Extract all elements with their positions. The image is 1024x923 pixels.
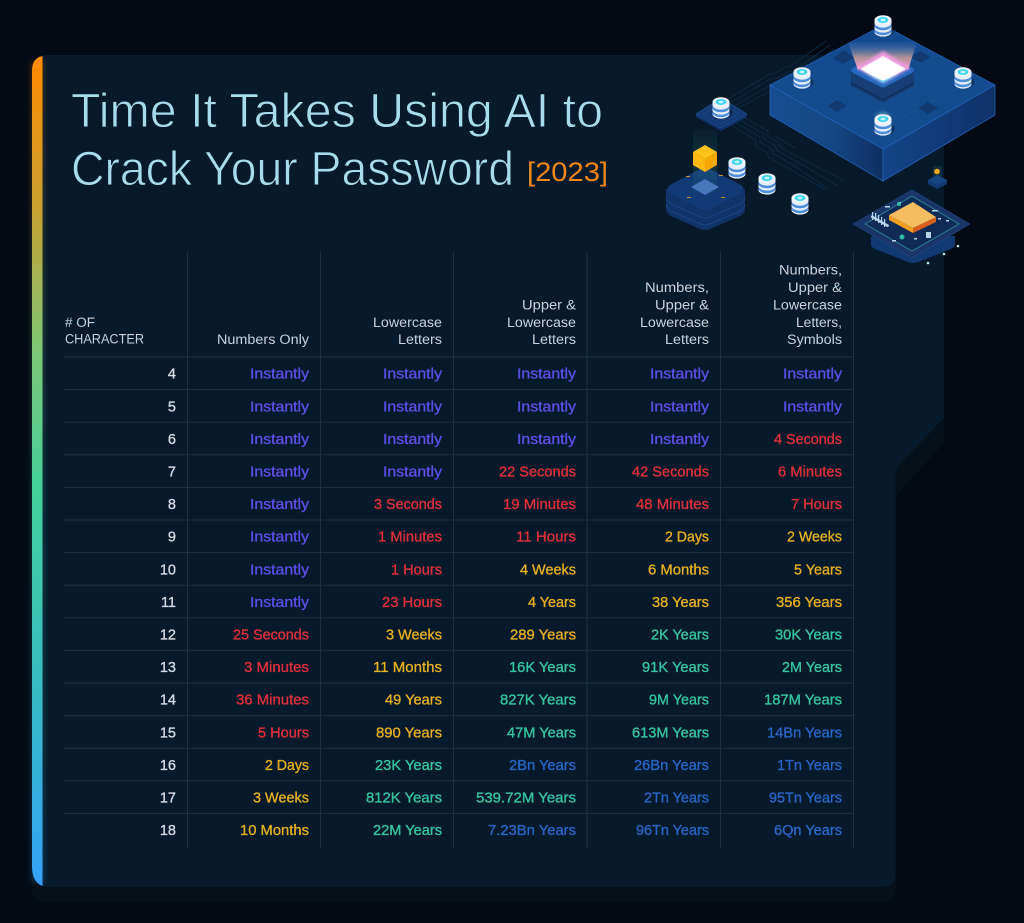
row 14 characters: 827K Years — [500, 693, 576, 709]
row 17 characters: 95Tn Years — [769, 790, 842, 806]
row 18 characters: 6Qn Years — [774, 823, 842, 839]
header: numbers upper lowercase letters: Upper & — [655, 298, 709, 312]
row 6 characters: Instantly — [650, 432, 710, 448]
header: numbers upper lowercase letters symbols: Symbols — [787, 332, 842, 347]
light cone — [848, 42, 917, 70]
row 16 characters: 26Bn Years — [634, 758, 709, 774]
illustration: large server platform — [770, 25, 995, 181]
gradient accent bar — [31, 56, 44, 886]
row 6 characters: Instantly — [383, 432, 443, 448]
row 10 characters: 4 Weeks — [520, 562, 576, 578]
icon: database trail 2 — [758, 173, 778, 195]
row 18 characters: 7.23Bn Years — [488, 823, 576, 839]
row 9 characters: Instantly — [250, 530, 310, 546]
indicator dots — [927, 245, 959, 264]
row 15 characters: 14Bn Years — [767, 725, 842, 741]
header: upper and lowercase letters: Upper & — [522, 298, 576, 312]
row 6 characters: Instantly — [517, 432, 577, 448]
row 5 characters: Instantly — [383, 399, 443, 415]
row 18 characters: 22M Years — [373, 823, 442, 839]
header: numbers only: Numbers Only — [217, 332, 309, 347]
row 8 characters: 3 Seconds — [374, 497, 442, 513]
row 8 characters — [168, 497, 842, 513]
row 8 characters: 19 Minutes — [503, 497, 576, 513]
row 17 characters: 2Tn Years — [644, 790, 709, 806]
inner pad — [691, 179, 719, 195]
platform right face — [883, 85, 995, 181]
row 5 characters: Instantly — [650, 399, 710, 415]
glowing screen — [857, 51, 910, 83]
header: upper and lowercase letters: Letters — [532, 332, 576, 347]
row 11 characters: Instantly — [250, 595, 310, 611]
row 16 characters: 2 Days — [265, 758, 309, 774]
row 17 characters: 539.72M Years — [476, 790, 576, 806]
header: numbers upper lowercase letters symbols: Lowercase — [773, 298, 842, 312]
illustration: small beacon — [928, 166, 947, 189]
icon: database trail 3 — [792, 193, 812, 215]
title year tag: [2023] — [527, 157, 608, 187]
row 14 characters: 9M Years — [649, 693, 709, 709]
illustration: circuit traces — [726, 41, 845, 190]
header: numbers upper lowercase letters: Lowercase — [640, 315, 709, 330]
row 4 characters: Instantly — [517, 367, 577, 383]
row 6 characters: 4 Seconds — [774, 432, 842, 448]
row 15 characters: 890 Years — [376, 725, 442, 741]
row 16 characters: 2Bn Years — [509, 758, 576, 774]
row 5 characters: 5 — [168, 399, 176, 415]
header: numbers upper lowercase letters — [640, 280, 709, 347]
row 6 characters — [168, 432, 842, 448]
row 10 characters: 6 Months — [648, 562, 709, 578]
row 12 characters: 2K Years — [651, 628, 709, 644]
row 12 characters: 289 Years — [510, 628, 576, 644]
title: Time It Takes Using AI to — [71, 85, 603, 138]
icon: database on node — [712, 97, 732, 119]
header: numbers upper lowercase letters: Letters — [665, 332, 709, 347]
header: numbers upper lowercase letters symbols — [773, 262, 842, 347]
row 11 characters: 11 — [161, 595, 176, 611]
row 14 characters: 36 Minutes — [236, 693, 309, 709]
row 11 characters: 23 Hours — [382, 595, 442, 611]
platform left face — [770, 85, 883, 181]
row 10 characters: 5 Years — [794, 562, 842, 578]
header: upper and lowercase letters — [507, 298, 576, 347]
row 7 characters: 6 Minutes — [778, 464, 842, 480]
header: upper and lowercase letters: Lowercase — [507, 315, 576, 330]
row 14 characters: 14 — [160, 693, 176, 709]
row 15 characters: 15 — [160, 725, 176, 741]
row 12 characters: 25 Seconds — [233, 628, 309, 644]
title: Crack Your Password — [71, 143, 514, 196]
row 12 characters: 3 Weeks — [386, 628, 442, 644]
row 9 characters: 11 Hours — [516, 530, 576, 546]
row 4 characters: Instantly — [250, 367, 310, 383]
row 18 characters: 18 — [160, 823, 176, 839]
header: lowercase letters: Letters — [398, 332, 442, 347]
row 11 characters: 38 Years — [652, 595, 709, 611]
header: numbers upper lowercase letters symbols: Numbers, — [779, 262, 842, 278]
orange processor block — [889, 215, 913, 233]
row 7 characters: 42 Seconds — [632, 464, 709, 480]
icon: database top — [874, 15, 894, 37]
row 17 characters: 812K Years — [366, 790, 442, 806]
row 5 characters: Instantly — [250, 399, 310, 415]
row 13 characters: 13 — [160, 660, 176, 676]
row 15 characters: 47M Years — [507, 725, 576, 741]
illustration: small node platform — [696, 97, 747, 131]
table body — [160, 367, 843, 839]
row 4 characters: 4 — [168, 367, 176, 383]
row 9 characters: 1 Minutes — [378, 530, 442, 546]
row 8 characters: 8 — [168, 497, 176, 513]
row 7 characters: 22 Seconds — [499, 464, 576, 480]
row 5 characters: Instantly — [517, 399, 577, 415]
icon: database trail 1 — [728, 157, 748, 179]
row 11 characters: 4 Years — [528, 595, 576, 611]
row 12 characters: 30K Years — [775, 628, 842, 644]
row 4 characters: Instantly — [650, 367, 710, 383]
row 16 characters: 1Tn Years — [777, 758, 842, 774]
header: numbers upper lowercase letters symbols: Letters, — [796, 315, 842, 330]
row 11 characters: 356 Years — [776, 595, 842, 611]
platform sockets — [828, 50, 938, 114]
row 7 characters: Instantly — [383, 464, 443, 480]
row 12 characters — [160, 628, 842, 644]
row 16 characters: 16 — [160, 758, 176, 774]
illustration: processor chip — [853, 190, 970, 264]
row 11 characters — [161, 595, 842, 611]
row 18 characters: 96Tn Years — [636, 823, 709, 839]
header: number of characters: # OF — [65, 315, 95, 330]
row 4 characters: Instantly — [383, 367, 443, 383]
platform top face — [770, 25, 995, 149]
icon: database right — [954, 67, 974, 89]
row 14 characters: 49 Years — [385, 693, 442, 709]
row 10 characters — [160, 562, 842, 578]
row 8 characters: 48 Minutes — [636, 497, 709, 513]
row 9 characters — [168, 530, 842, 546]
row 7 characters: 7 — [168, 464, 176, 480]
header: number of characters — [65, 315, 144, 346]
data table — [64, 252, 854, 848]
row 14 characters: 187M Years — [764, 693, 842, 709]
row 9 characters: 2 Weeks — [787, 530, 842, 546]
row 15 characters: 613M Years — [632, 725, 709, 741]
row 7 characters: Instantly — [250, 464, 310, 480]
row 4 characters: Instantly — [783, 367, 843, 383]
row 8 characters: 7 Hours — [791, 497, 842, 513]
row 9 characters: 2 Days — [665, 530, 709, 546]
table header — [65, 262, 842, 347]
row 13 characters: 16K Years — [509, 660, 576, 676]
row 13 characters: 2M Years — [782, 660, 842, 676]
row 10 characters: 10 — [160, 562, 176, 578]
row 6 characters: 6 — [168, 432, 176, 448]
row 8 characters: Instantly — [250, 497, 310, 513]
row 18 characters: 10 Months — [240, 823, 309, 839]
row 18 characters — [160, 823, 842, 839]
row 9 characters: 9 — [168, 530, 176, 546]
icon: database left — [794, 67, 814, 89]
row 16 characters: 23K Years — [375, 758, 442, 774]
header: lowercase letters — [373, 315, 442, 347]
row 6 characters: Instantly — [250, 432, 310, 448]
row 5 characters — [168, 399, 843, 415]
row 17 characters: 17 — [160, 790, 176, 806]
beam — [693, 129, 717, 193]
row 17 characters: 3 Weeks — [253, 790, 309, 806]
row 13 characters: 91K Years — [642, 660, 709, 676]
illustration: stacked platform with cube — [666, 129, 745, 230]
row 13 characters: 11 Months — [373, 660, 442, 676]
row 12 characters: 12 — [160, 628, 176, 644]
row 13 characters: 3 Minutes — [244, 660, 309, 676]
row 13 characters — [160, 660, 842, 676]
header: lowercase letters: Lowercase — [373, 315, 442, 330]
center chip base — [851, 53, 914, 103]
row 17 characters — [160, 790, 842, 806]
row 15 characters: 5 Hours — [258, 725, 309, 741]
row 4 characters — [168, 367, 843, 383]
row 14 characters — [160, 693, 842, 709]
row 10 characters: 1 Hours — [391, 562, 442, 578]
row 7 characters — [168, 464, 842, 480]
title — [71, 85, 608, 196]
row 10 characters: Instantly — [250, 562, 310, 578]
header: number of characters: CHARACTER — [65, 332, 144, 346]
row 15 characters — [160, 725, 842, 741]
icon: database front — [874, 112, 894, 136]
header: numbers upper lowercase letters: Numbers, — [645, 280, 709, 295]
header: numbers upper lowercase letters symbols: Upper & — [788, 280, 842, 295]
row 5 characters: Instantly — [783, 399, 843, 415]
icon: yellow cube — [693, 145, 717, 172]
main panel — [42, 55, 944, 887]
row 16 characters — [160, 758, 842, 774]
table grid — [64, 252, 854, 848]
